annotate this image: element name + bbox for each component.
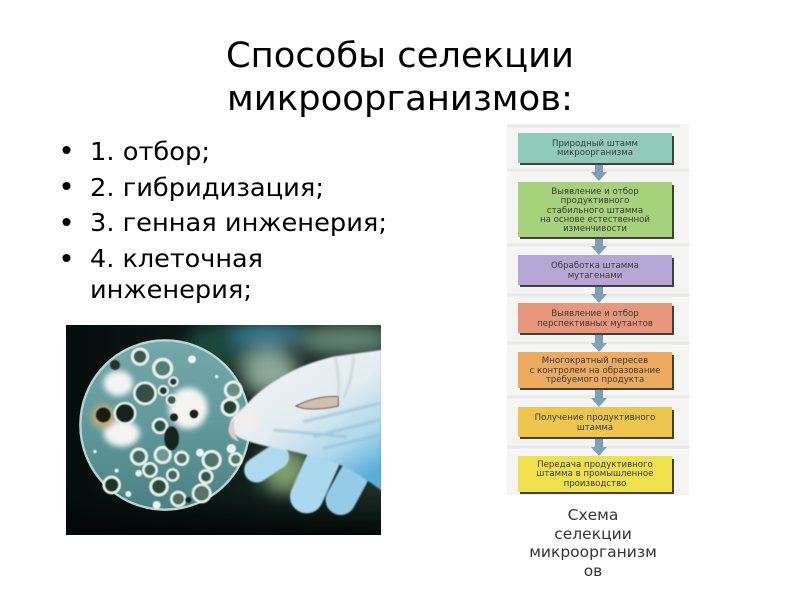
box 7: штамма в промышленное	[537, 469, 653, 479]
arrow	[591, 439, 607, 456]
box 7: производство	[564, 479, 626, 489]
box 3: мутагенами	[568, 271, 622, 281]
title: микроорганизмов:	[227, 79, 573, 119]
box 4: Выявление и отбор	[551, 309, 639, 319]
gloved hand	[228, 350, 382, 500]
arrow	[591, 238, 607, 255]
box 1: микроорганизма	[557, 148, 633, 158]
box 2	[518, 182, 674, 239]
photo: petri dish held by gloved hand	[66, 322, 393, 535]
caption: Схема	[568, 506, 618, 524]
bullet list: 1. отбор;	[90, 137, 210, 166]
box 6: Получение продуктивного	[535, 413, 655, 423]
box 6	[518, 407, 674, 439]
caption: ов	[584, 562, 602, 580]
bullet list: 3. генная инженерия;	[90, 208, 387, 237]
box 2: продуктивного	[561, 196, 629, 206]
box 5: Многократный пересев	[542, 356, 648, 366]
box 7	[518, 456, 674, 494]
box 5	[518, 352, 674, 390]
box 3	[518, 255, 674, 287]
petri dish	[80, 340, 250, 510]
box 4	[518, 303, 674, 335]
bullet list: инженерия;	[90, 275, 252, 304]
glove fold opening	[296, 397, 338, 409]
box 2: Выявление и отбор	[551, 187, 639, 197]
arrow	[591, 335, 607, 352]
box 2: на основе естественной	[540, 215, 650, 225]
bullet list	[62, 137, 387, 304]
box 4: перспективных мутантов	[537, 319, 653, 329]
arrow	[591, 389, 607, 407]
caption: селекции	[554, 525, 632, 543]
box 5: с контролем на образование	[530, 366, 660, 376]
box 2: изменчивости	[563, 224, 627, 234]
caption: микроорганизм	[529, 543, 657, 561]
title	[226, 36, 574, 119]
bullet list: 2. гибридизация;	[90, 173, 324, 202]
arrow	[591, 165, 607, 181]
box 5: требуемого продукта	[546, 375, 644, 385]
arrow	[591, 287, 607, 303]
box 2: стабильного штамма	[547, 206, 643, 216]
box 1	[518, 133, 674, 165]
box 1: Природный штамм	[552, 139, 638, 149]
box 7: Передача продуктивного	[537, 460, 653, 470]
caption	[529, 506, 657, 580]
title: Способы селекции	[226, 36, 574, 76]
bullet list: 4. клеточная	[90, 244, 263, 273]
box 6: штамма	[577, 423, 613, 433]
flowchart: microorganism selection scheme	[507, 124, 689, 495]
box 3: Обработка штамма	[551, 261, 639, 271]
